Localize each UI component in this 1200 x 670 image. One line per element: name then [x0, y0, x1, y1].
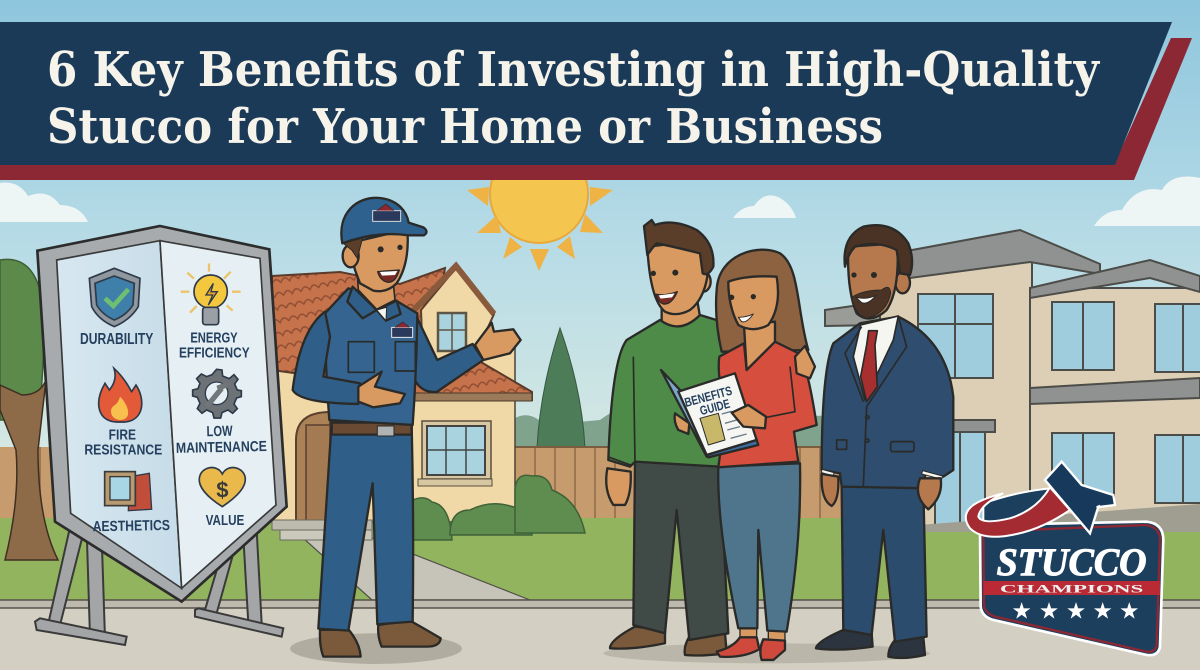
homeowners and agent	[603, 220, 953, 663]
eyes	[378, 245, 403, 252]
main roof	[272, 268, 445, 390]
walkway and steps	[272, 520, 530, 600]
man: face features	[651, 270, 678, 304]
shirt pockets	[348, 342, 415, 372]
icon: shield	[89, 268, 140, 327]
sign legs	[35, 520, 283, 645]
shirt torso	[325, 288, 417, 425]
belt	[332, 423, 412, 436]
label: fire resistance: RESISTANCE	[84, 442, 162, 458]
label: energy efficiency: ENERGY	[190, 331, 238, 347]
grass	[0, 518, 1200, 602]
man: head	[647, 240, 711, 314]
agent: beard	[852, 287, 891, 318]
logo trowel	[1045, 462, 1115, 533]
woman: jeans	[718, 463, 800, 632]
right arm	[413, 313, 483, 392]
shadow	[290, 633, 462, 664]
logo swoosh backing	[983, 488, 1063, 533]
hands	[358, 323, 521, 407]
front door	[296, 412, 330, 522]
icon: gear and wrench	[193, 369, 241, 418]
agent: hands	[822, 474, 941, 509]
icon: heart with dollar: $	[216, 477, 228, 502]
agent: trousers	[842, 487, 927, 642]
dormer	[421, 268, 494, 362]
head	[348, 229, 408, 291]
woman: face	[728, 276, 778, 370]
logo red band: CHAMPIONS	[1000, 582, 1144, 596]
agent: head	[848, 243, 910, 318]
icon: heart with dollar	[199, 468, 245, 507]
logo badge	[980, 522, 1163, 655]
sign face left	[57, 241, 182, 588]
agent: eyes	[851, 272, 877, 278]
title banner	[0, 22, 1192, 180]
guide book	[661, 370, 758, 457]
label: fire resistance: FIRE	[109, 427, 136, 443]
man: green sweater	[608, 315, 733, 467]
woman: hair	[716, 250, 808, 352]
icon: light bulb	[181, 263, 241, 325]
label: energy efficiency	[179, 331, 250, 361]
sky background	[0, 0, 1200, 530]
smile	[378, 270, 399, 282]
house wall	[272, 340, 515, 522]
agent: smile	[856, 295, 876, 303]
label: energy efficiency: EFFICIENCY	[179, 345, 250, 361]
sun	[467, 145, 613, 271]
contractor figure	[290, 198, 521, 664]
man: hand	[606, 468, 631, 505]
logo stars: ★★★★★	[1012, 598, 1139, 624]
fence	[0, 447, 845, 521]
lower right roof	[410, 358, 532, 400]
benefits sign	[35, 226, 287, 645]
ear and hair	[343, 235, 363, 267]
label: durability: DURABILITY	[80, 331, 153, 348]
agent: shirt and tie	[853, 316, 898, 402]
label: low maintenance	[175, 423, 267, 457]
neck	[357, 273, 395, 309]
shadow	[603, 643, 930, 663]
agent: hair	[845, 225, 912, 275]
icon: framed mirror and swatch	[105, 472, 152, 511]
label: aesthetics: AESTHETICS	[93, 518, 170, 535]
label: low maintenance: MAINTENANCE	[176, 439, 267, 457]
banner navy band	[0, 22, 1172, 165]
woman: red top	[718, 342, 817, 467]
man: trousers	[633, 462, 728, 640]
icon: flame	[99, 368, 142, 422]
pavement	[0, 600, 1200, 670]
background trees and hedge	[515, 328, 850, 448]
clouds	[0, 176, 1200, 226]
label: fire resistance	[84, 427, 162, 458]
man: hair	[644, 220, 713, 274]
woman: ankles	[740, 625, 785, 643]
title text: 6 Key Benefits of Investing in High-Quality	[47, 42, 1101, 98]
left arm	[293, 312, 360, 404]
woman: shoes	[717, 637, 785, 660]
dormer window	[438, 313, 466, 351]
man: sleeve line	[609, 357, 635, 465]
guide book: BENEFITS	[683, 384, 734, 410]
cap badge	[373, 204, 401, 221]
left tree	[0, 259, 58, 560]
man: neck	[662, 297, 700, 327]
agent: shoes	[816, 630, 925, 658]
sign face right	[160, 241, 276, 588]
house	[272, 266, 532, 522]
boots	[320, 621, 441, 657]
title banner: Stucco for Your Home or Business	[47, 99, 883, 155]
hands on book and shoulder	[675, 346, 815, 434]
logo: Stucco Champions	[966, 462, 1163, 655]
logo swoosh	[966, 487, 1070, 537]
chest badge	[392, 322, 413, 337]
banner red accent	[0, 38, 1192, 180]
label: value: VALUE	[206, 513, 244, 529]
shrubs	[413, 475, 585, 540]
label: low maintenance: LOW	[206, 424, 233, 440]
guide book: GUIDE	[698, 397, 732, 418]
shirt collar	[347, 287, 401, 321]
front window	[418, 421, 492, 486]
man: shoes	[610, 627, 727, 656]
office building	[825, 230, 1200, 532]
logo wordmark: STUCCO	[997, 542, 1147, 584]
woman: features	[729, 294, 756, 322]
cap	[341, 198, 426, 243]
agent: jacket	[822, 317, 953, 488]
agent: cuffs	[822, 469, 943, 479]
trousers	[318, 422, 413, 631]
woman: sleeve crease	[767, 367, 795, 417]
logo red band	[983, 581, 1160, 596]
sign frame	[37, 226, 287, 602]
agent: lapels and pockets	[837, 317, 914, 487]
